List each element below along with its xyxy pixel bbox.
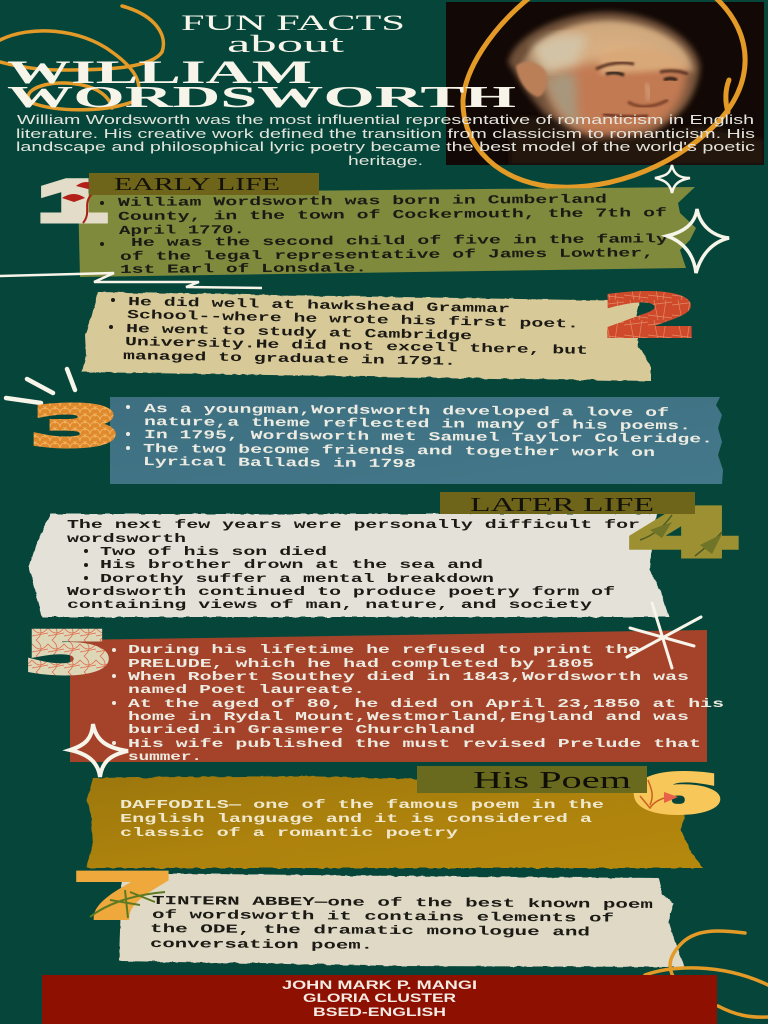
text: later life: The next few years were personally difficult for	[67, 518, 640, 532]
text: early life: County, in the town of Cockermouth, the 7th of	[118, 206, 667, 224]
number 5: 5	[24, 621, 112, 686]
paper strip white	[29, 514, 669, 617]
text: death: During his lifetime he refused to print the	[128, 643, 640, 657]
sparkle beside panel 5	[70, 724, 128, 777]
text: early life	[100, 193, 669, 277]
footer credits: GLORIA CLUSTER	[303, 991, 456, 1005]
text: early life: 1st Earl of Lonsdale.	[120, 261, 367, 277]
text: later life: Dorothy suffer a mental breakdown	[100, 572, 494, 586]
text: tintern abbey: conversation poem.	[150, 937, 373, 953]
intro text	[16, 112, 756, 168]
text: daffodils: English language and it is considered a	[120, 812, 593, 826]
text: later life	[67, 518, 640, 612]
text: school	[109, 295, 588, 369]
text: youth: The two become friends and together work on	[143, 442, 655, 460]
text: death	[112, 643, 724, 764]
title: about	[227, 32, 345, 58]
title: WORDSWORTH	[7, 79, 516, 114]
number 7	[74, 858, 171, 932]
text: death: His wife published the must revised Prelude that	[128, 737, 701, 751]
text: later life: Two of his son died	[100, 545, 327, 559]
panel 1: early life	[38, 169, 696, 277]
text: early life: April 1770.	[119, 223, 245, 238]
footer credits: JOHN MARK P. MANGI	[282, 978, 477, 992]
paper strip teal	[110, 397, 723, 484]
orange scribble bottom right	[645, 931, 768, 1017]
text: daffodils: classic of a romantic poetry	[120, 826, 459, 840]
intro text: landscape and philosophical lyric poetry became the best model of the world's poetic	[16, 139, 756, 154]
text: school: He went to study at Cambridge	[126, 322, 472, 343]
footer credits	[42, 975, 717, 1024]
intro text: literature. His creative work defined the transition from classicism to romanticism. His	[16, 126, 755, 141]
text: later life: wordsworth	[67, 532, 186, 546]
number 3: 3	[31, 395, 120, 458]
intro text: William Wordsworth was the most influential representative of romanticism in English	[17, 112, 754, 127]
panel 6: his poem	[86, 765, 721, 868]
panel 5: death	[24, 621, 724, 764]
paper strip olive	[78, 187, 696, 277]
heading: early life: EARLY LIFE	[114, 174, 280, 194]
text: early life: He was the second child of five in the family	[131, 232, 669, 250]
text: tintern abbey: the ODE, the dramatic monologue and	[150, 922, 590, 939]
paper strip red	[70, 630, 707, 762]
panel 3: youth	[31, 395, 723, 484]
sparkle small	[655, 165, 690, 193]
panel 4: later life	[29, 492, 740, 617]
number 1	[38, 169, 106, 234]
sparkle large	[667, 209, 729, 273]
panel 2: school	[82, 282, 699, 381]
title	[7, 10, 516, 114]
intro text: heritage.	[348, 153, 423, 168]
zigzag line	[0, 273, 262, 288]
text: tintern abbey	[150, 894, 653, 953]
footer credits: BSED-ENGLISH	[313, 1005, 446, 1019]
heading: his poem: His Poem	[473, 768, 632, 794]
number 6	[632, 765, 721, 825]
text: death: buried in Grasmere Churchland	[128, 723, 475, 737]
heading: later life	[440, 492, 695, 516]
text: death: When Robert Southey died in 1843,Wordsworth was	[128, 670, 689, 684]
text: tintern abbey: TINTERN ABBEY—one of the best known poem	[152, 894, 653, 912]
panel 7: tintern abbey	[74, 858, 684, 967]
text: youth: In 1795, Wordsworth met Samuel Taylor Coleridge.	[144, 428, 713, 446]
orange scribble around portrait	[463, 0, 745, 187]
text: death: PRELUDE, which he had completed by 1805	[128, 657, 594, 671]
text: later life: Wordsworth continued to produce poetry form of	[67, 585, 615, 599]
text: later life: His brother drown at the sea and	[100, 558, 483, 572]
number 4: 4	[628, 495, 740, 572]
text: school: School--where he wrote his first poet.	[127, 308, 579, 331]
text: youth: Lyrical Ballads in 1798	[143, 455, 416, 471]
paper strip mustard	[86, 776, 703, 868]
paper strip grey	[119, 873, 684, 967]
heading: later life: LATER LIFE	[470, 494, 654, 516]
text: tintern abbey: of wordsworth it contains elements of	[152, 908, 614, 926]
text: early life: of the legal representative of James Lowther,	[120, 246, 654, 264]
text: youth: nature,a theme reflected in many of his poems.	[144, 415, 691, 433]
text: early life: William Wordsworth was born in Cumberland	[118, 193, 607, 210]
portrait of William Wordsworth	[446, 2, 764, 165]
number 6: 6	[632, 765, 721, 825]
number 4	[628, 495, 740, 572]
title: WILLIAM	[7, 55, 312, 91]
orange scribble top left	[0, 6, 163, 110]
heading: his poem	[417, 766, 647, 794]
number 1: 1	[38, 169, 106, 234]
burst lines	[6, 369, 75, 403]
number 7: 7	[74, 858, 171, 932]
asterisk doodle	[627, 603, 701, 668]
text: death: summer.	[128, 750, 202, 764]
text: death: named Poet laureate.	[128, 683, 365, 697]
text: death: home in Rydal Mount,Westmorland,England and was	[128, 710, 689, 724]
text: school: managed to graduate in 1791.	[123, 349, 456, 369]
text: school: He did well at hawkshead Grammar	[128, 295, 510, 316]
text: daffodils	[120, 798, 604, 840]
heading: early life	[89, 173, 319, 195]
number 2: 2	[601, 282, 699, 350]
text: daffodils: DAFFODILS— one of the famous poem in the	[120, 798, 604, 812]
text: death: At the aged of 80, he died on April 23,1850 at his	[128, 697, 724, 711]
title: FUN FACTS	[181, 10, 405, 35]
text: youth: As a youngman,Wordsworth developed a love of	[144, 402, 669, 420]
text: later life: containing views of man, nature, and society	[67, 598, 593, 612]
text: youth	[126, 402, 713, 471]
paper strip tan	[82, 292, 651, 381]
text: school: University.He did not excell there, but	[125, 335, 588, 358]
